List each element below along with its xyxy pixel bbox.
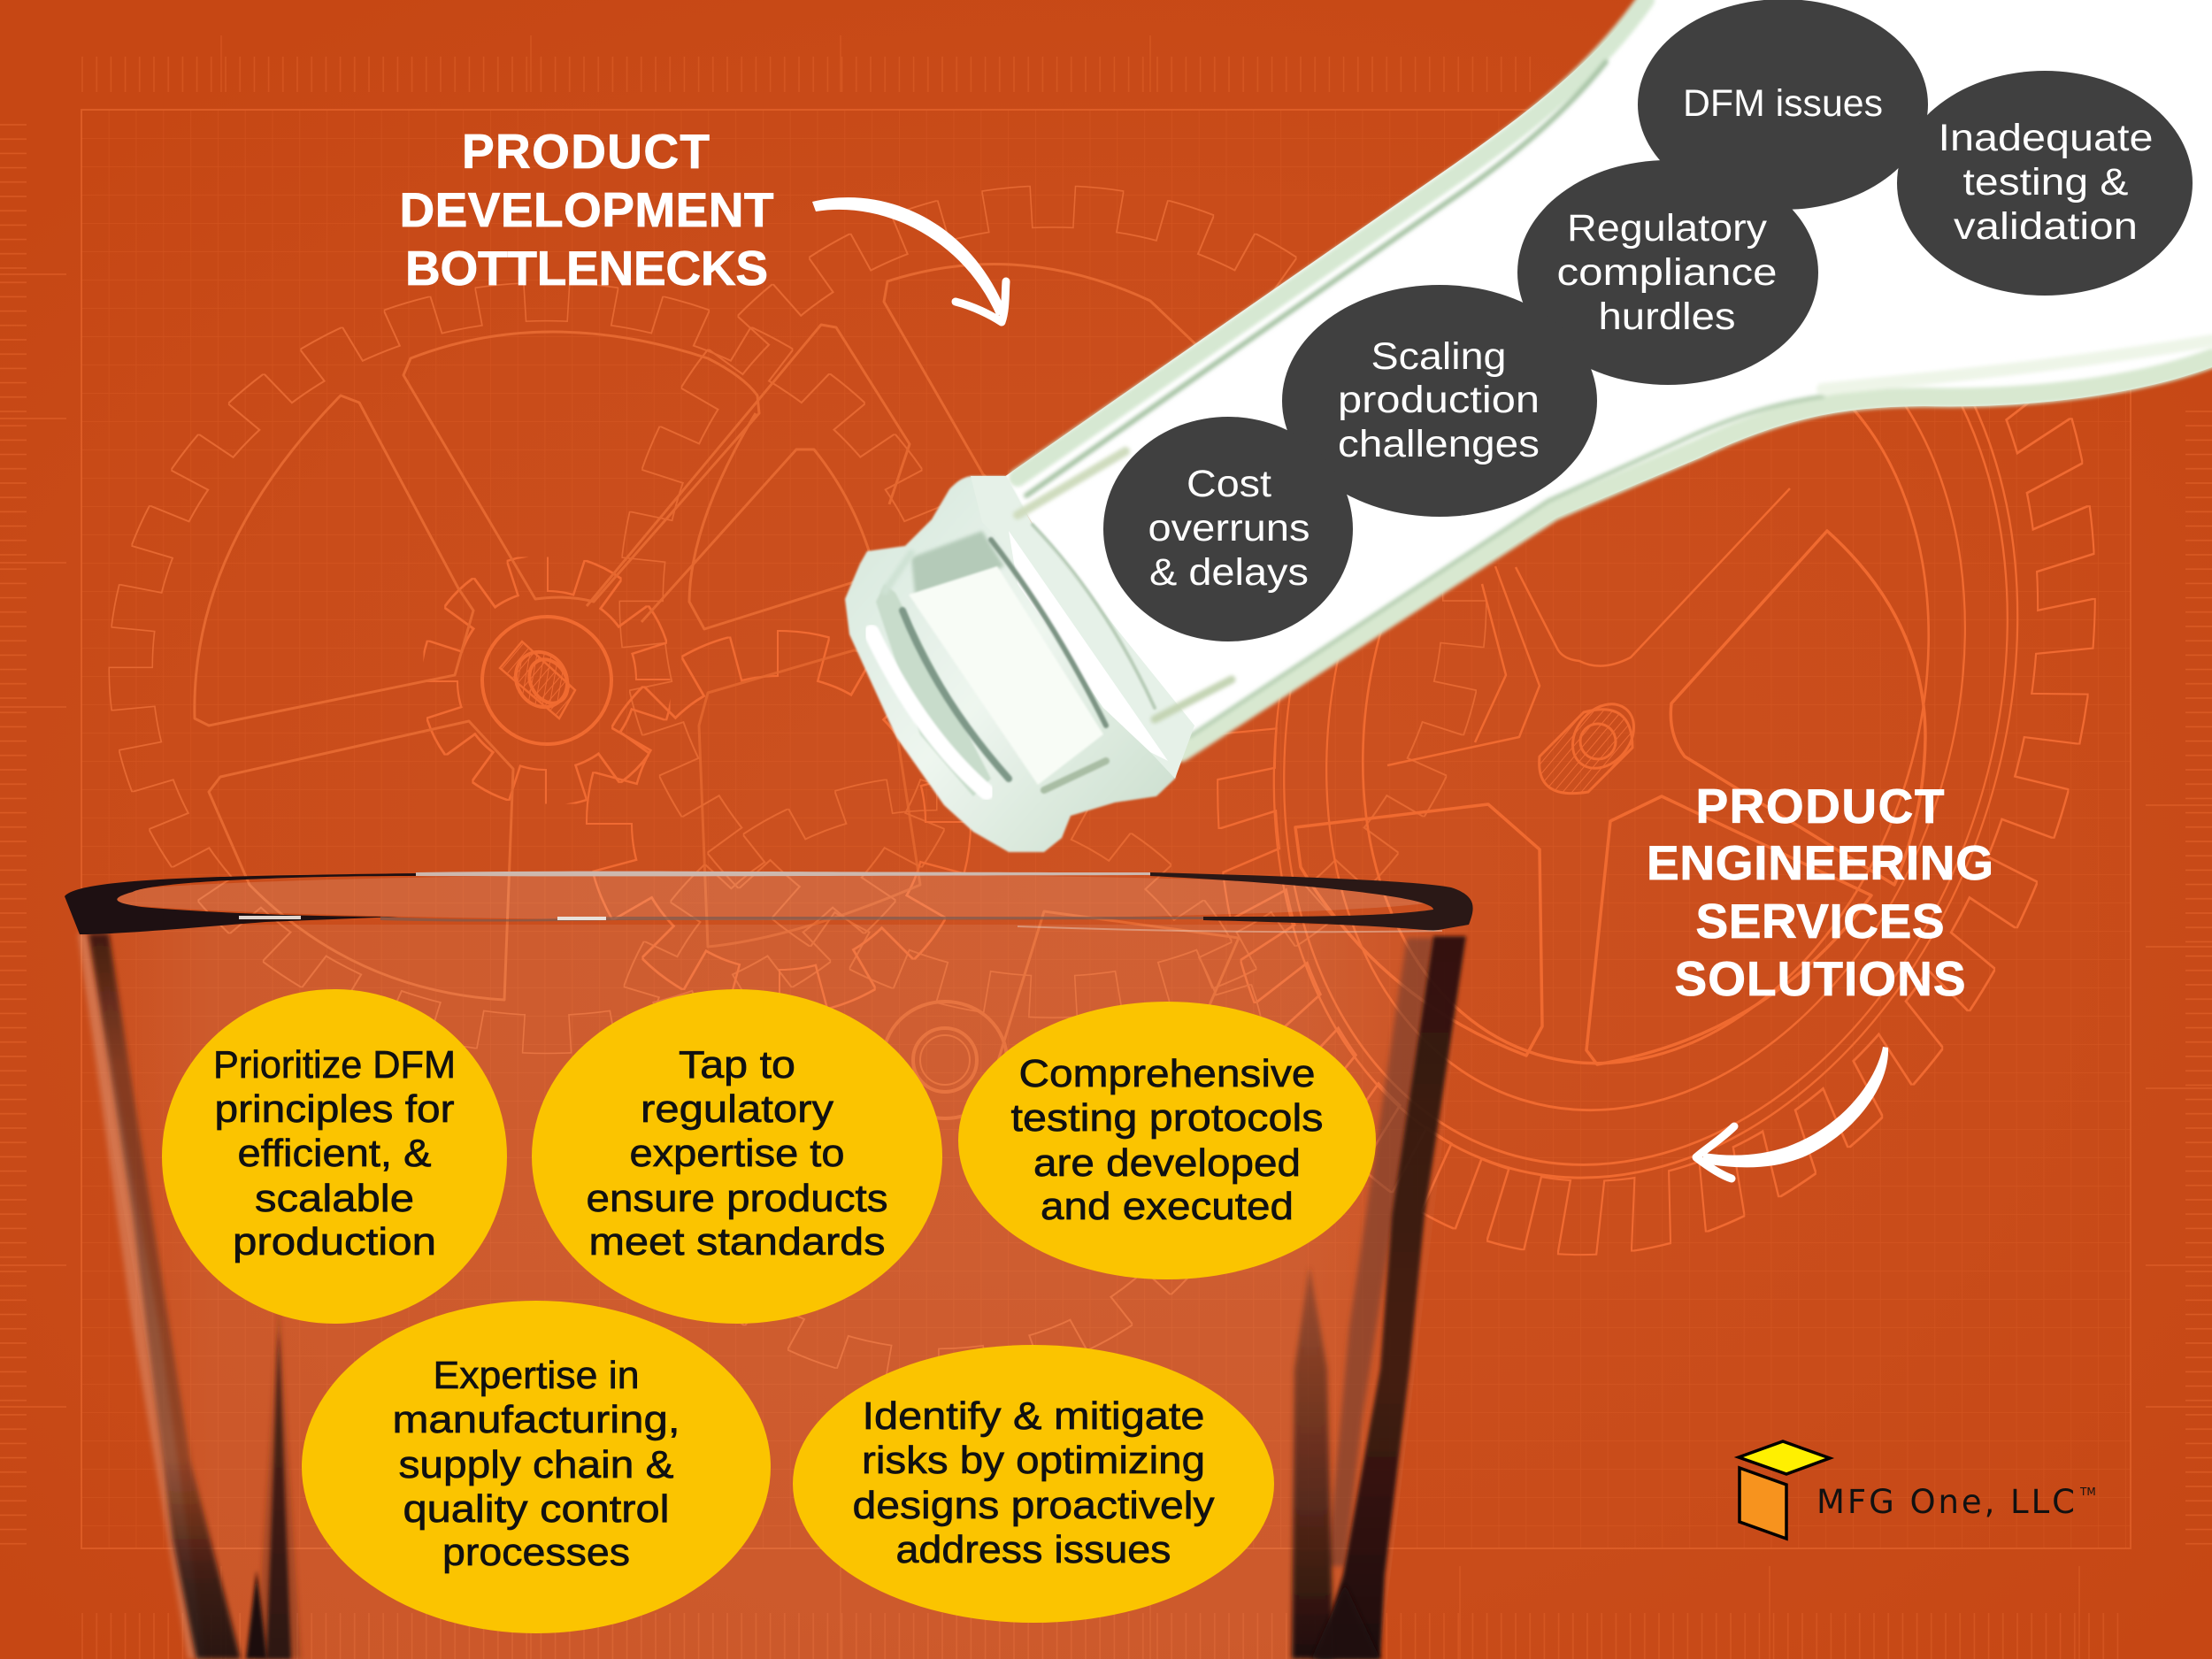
bottleneck: inadequate testing: testing &: [1962, 161, 2129, 204]
solution: regulatory expertise: [532, 989, 942, 1324]
solution: regulatory expertise: ensure products: [586, 1177, 888, 1220]
heading: product development bottlenecks: DEVELOPMENT: [400, 182, 773, 237]
gear: centre top: [642, 208, 1463, 995]
bottleneck: inadequate testing: validation: [1954, 205, 2138, 248]
hub left: [482, 617, 611, 744]
bottle edge tints: [1018, 0, 2212, 752]
heading: product development bottlenecks: PRODUCT: [462, 124, 710, 179]
bottleneck: scaling production: Scaling: [1371, 335, 1506, 378]
arrow: heading to bottle: [812, 197, 1006, 322]
logo: MFG One, LLC: [1739, 1441, 2096, 1539]
solution: risk mitigation: Identify & mitigate: [862, 1394, 1205, 1438]
glass rim interior: [88, 874, 1451, 920]
bottleneck: scaling production: challenges: [1338, 423, 1540, 465]
hub lower centre: [883, 1002, 1007, 1118]
arrow: solutions to glass: [1696, 1047, 1888, 1179]
solution: manufacturing expertise: quality control: [403, 1487, 669, 1531]
gear right windows: [1160, 127, 2131, 1271]
solution: testing protocols: and executed: [1041, 1185, 1294, 1228]
solution: DFM principles: Prioritize DFM: [213, 1043, 456, 1087]
logo text: TM: [2079, 1486, 2096, 1498]
bottleneck: DFM issues: DFM issues: [1683, 82, 1883, 125]
glass rim: [65, 872, 1473, 934]
heading: product development bottlenecks: BOTTLENECKS: [405, 241, 768, 296]
bottle: [845, 0, 2212, 852]
gear: right large: [1124, 63, 2189, 1317]
solution: risk mitigation: risks by optimizing: [862, 1439, 1205, 1482]
drinking glass: [65, 872, 1473, 1659]
solution: testing protocols: Comprehensive: [1019, 1052, 1315, 1095]
heading: product engineering services solutions: SERVICES: [1695, 894, 1945, 949]
bottleneck: scaling production: production: [1338, 379, 1540, 421]
heading: product engineering services solutions: [1647, 779, 1993, 1006]
solution: testing protocols: [958, 1002, 1376, 1279]
icon: box: [1739, 1441, 1830, 1539]
gear: small middle: [611, 655, 947, 991]
solution: regulatory expertise: regulatory: [641, 1087, 833, 1131]
bottleneck: cost overruns: [1103, 417, 1353, 641]
solution: DFM principles: principles for: [214, 1087, 455, 1131]
heading: product engineering services solutions: PRODUCT: [1695, 779, 1945, 833]
gears blueprint: [133, 63, 2189, 1364]
bottleneck: scaling production: [1282, 285, 1597, 517]
gear: lower centre: [628, 795, 1248, 1364]
gear: left large: [133, 303, 961, 1033]
gear: left pinion: [441, 574, 653, 787]
solution: manufacturing expertise: Expertise in: [434, 1354, 639, 1397]
bottleneck: cost overruns: overruns: [1148, 507, 1310, 549]
solution: DFM principles: scalable: [255, 1177, 414, 1220]
solution: risk mitigation: address issues: [895, 1528, 1171, 1571]
heading: product engineering services solutions: ENGINEERING: [1647, 835, 1993, 890]
solution: DFM principles: production: [233, 1220, 436, 1263]
bottleneck: inadequate testing: [1897, 71, 2193, 296]
solution: DFM principles: [162, 989, 507, 1324]
solution: risk mitigation: [793, 1345, 1274, 1623]
glass body: [75, 925, 1469, 1659]
bottleneck: regulatory compliance: compliance: [1557, 251, 1777, 294]
solution: testing protocols: testing protocols: [1010, 1096, 1324, 1140]
solution: DFM principles: efficient, &: [237, 1132, 432, 1175]
bottle mouth collar: [845, 451, 1232, 852]
solution: regulatory expertise: meet standards: [589, 1220, 885, 1263]
solution: manufacturing expertise: supply chain &: [398, 1443, 674, 1486]
glass right wall: [1292, 936, 1466, 1659]
hub right: [1540, 692, 1647, 794]
solution: manufacturing expertise: manufacturing,: [393, 1398, 680, 1441]
heading: product engineering services solutions: SOLUTIONS: [1674, 951, 1966, 1006]
bottleneck: cost overruns: Cost: [1187, 463, 1271, 505]
bottleneck: DFM issues: [1638, 0, 1928, 210]
bottle body: [1004, 0, 2212, 759]
bottleneck: regulatory compliance: hurdles: [1598, 296, 1736, 338]
yellow solutions bubbles: [162, 989, 1376, 1633]
logo text: MFG One, LLC: [1816, 1483, 2075, 1521]
solution: testing protocols: are developed: [1033, 1141, 1301, 1185]
gear spoke windows: [195, 264, 1252, 1141]
solution: manufacturing expertise: processes: [442, 1531, 630, 1574]
glass left wall: [78, 933, 301, 1659]
heading: product development bottlenecks: [400, 124, 773, 296]
bottleneck: cost overruns: & delays: [1149, 551, 1309, 594]
solution: manufacturing expertise: [302, 1301, 771, 1633]
bottleneck: regulatory compliance: Regulatory: [1567, 207, 1768, 250]
solution: regulatory expertise: expertise to: [630, 1132, 844, 1175]
dark bottleneck bubbles: [1103, 0, 2193, 641]
solution: regulatory expertise: Tap to: [679, 1043, 795, 1087]
bottleneck: inadequate testing: Inadequate: [1938, 117, 2154, 159]
bottleneck: regulatory compliance: [1517, 160, 1818, 385]
solution: risk mitigation: designs proactively: [853, 1484, 1214, 1527]
